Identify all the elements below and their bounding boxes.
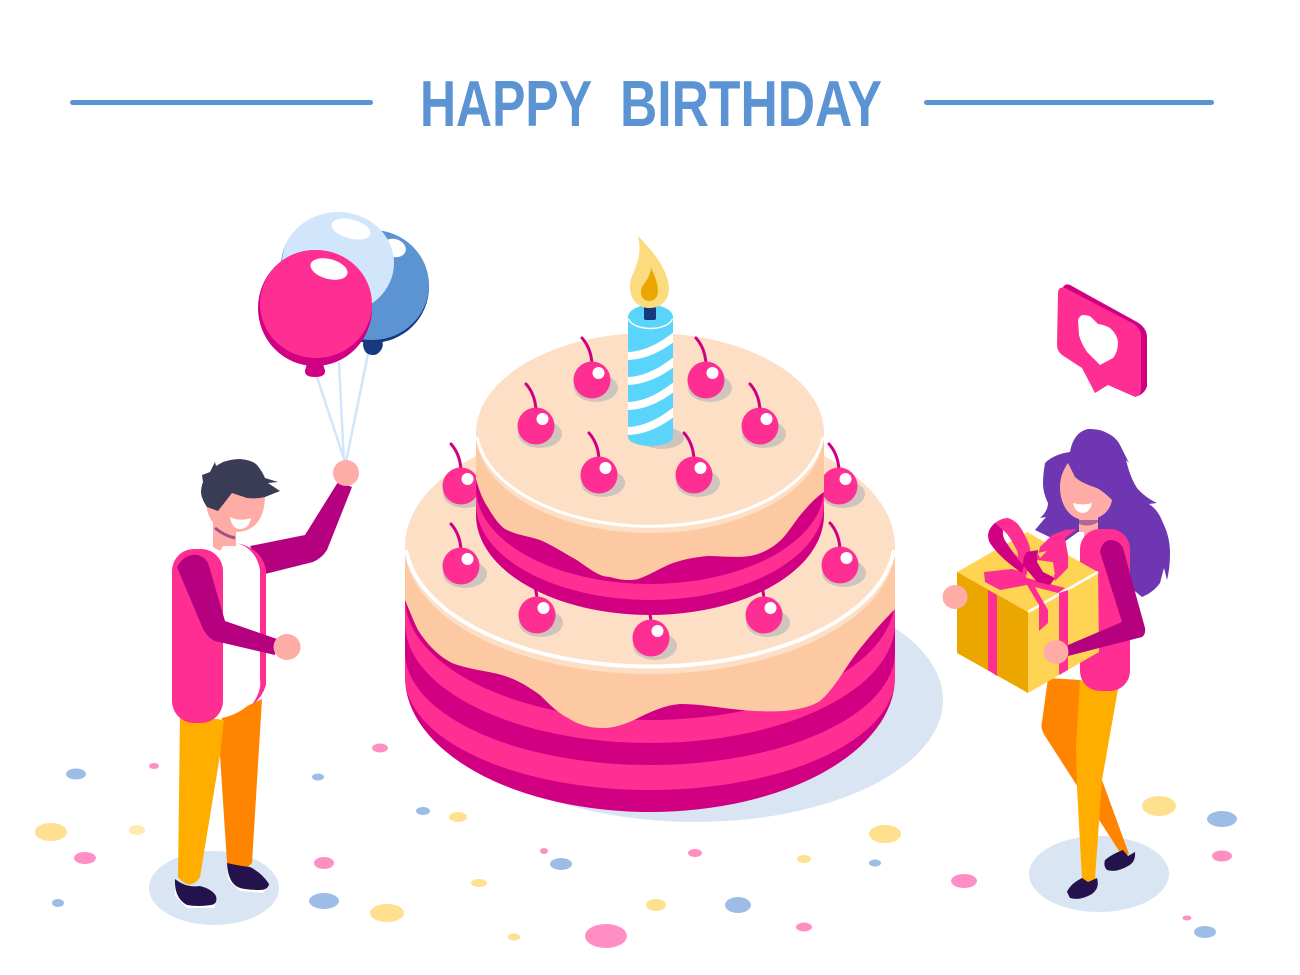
wick — [644, 306, 656, 320]
woman neck — [1079, 515, 1098, 540]
bow left dark band — [988, 523, 1024, 573]
man hand raised — [333, 460, 359, 486]
woman hand near — [1044, 640, 1068, 664]
woman smile — [1073, 503, 1092, 513]
man front leg — [178, 714, 224, 884]
woman shirt — [1060, 532, 1084, 560]
ribbon left — [988, 590, 997, 676]
lower tier — [405, 418, 895, 812]
bow right dark knot — [1023, 550, 1055, 585]
inner flame — [641, 268, 658, 301]
heart — [1078, 315, 1118, 365]
light balloon — [281, 212, 394, 316]
bow gaps — [1038, 551, 1055, 575]
man hand — [274, 634, 300, 660]
cherries on upper tier — [518, 338, 786, 497]
man jacket trim — [236, 543, 266, 705]
woman shoes — [1067, 850, 1135, 899]
man shadow — [149, 851, 279, 925]
balloon strings — [317, 354, 368, 462]
title line left — [70, 100, 373, 105]
box edge — [1028, 572, 1098, 612]
blue balloon — [315, 230, 429, 355]
ribbon top — [984, 569, 1065, 631]
woman jacket — [1080, 529, 1130, 691]
man neck — [213, 520, 236, 552]
title — [70, 67, 1214, 140]
cake shadow — [447, 578, 943, 822]
box left face — [957, 572, 1028, 693]
heading: happy: HAPPY — [420, 67, 592, 140]
man face — [205, 472, 265, 532]
woman with gift — [942, 284, 1170, 912]
man collar — [215, 528, 235, 538]
bow left loop — [988, 518, 1030, 576]
bow right pink loop — [1037, 529, 1077, 581]
box right face — [1028, 572, 1099, 693]
woman shadow — [1029, 836, 1169, 912]
man shirt white — [215, 546, 261, 719]
man right arm raised — [250, 482, 352, 574]
box top — [957, 532, 1098, 612]
heading: birthday: BIRTHDAY — [620, 67, 882, 140]
title line right — [924, 100, 1214, 105]
woman arm — [1068, 540, 1145, 656]
woman collar — [1079, 520, 1098, 526]
pink balloon — [258, 250, 372, 377]
woman hand far — [942, 585, 968, 609]
man left arm — [177, 555, 277, 655]
man hair — [201, 459, 280, 511]
woman orange leg — [1041, 678, 1129, 857]
confetti — [35, 744, 1237, 948]
candle — [626, 236, 684, 449]
cake — [405, 236, 943, 822]
upper tier — [476, 333, 824, 615]
man shoes — [175, 863, 269, 908]
man jacket — [172, 549, 223, 723]
woman hair — [1035, 429, 1170, 597]
man smile — [230, 517, 251, 529]
man back leg — [220, 699, 262, 870]
woman yellow leg — [1076, 680, 1118, 884]
woman face — [1060, 463, 1112, 520]
man with balloons — [149, 212, 429, 925]
cherries on lower tier — [442, 444, 866, 660]
flame — [630, 236, 669, 308]
ribbon right — [1059, 590, 1068, 675]
heart bubble — [1057, 284, 1147, 397]
gift box — [957, 518, 1099, 693]
